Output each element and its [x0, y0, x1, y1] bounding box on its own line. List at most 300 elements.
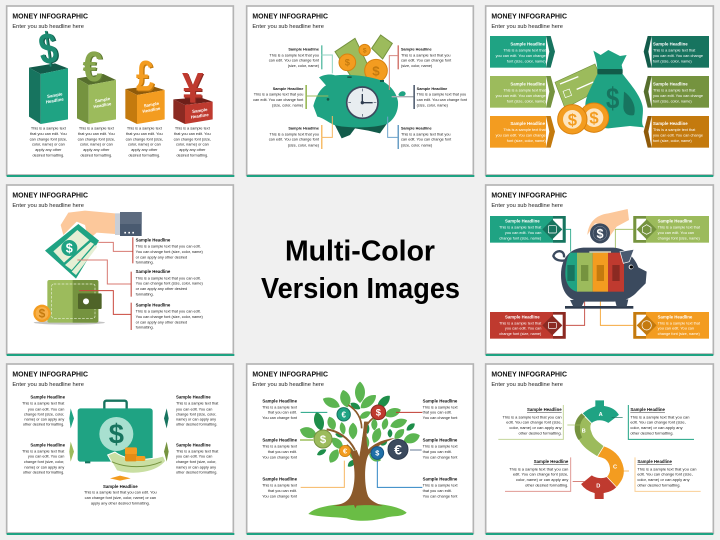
- callout: bottom left: Sample Headline: [288, 127, 319, 131]
- arrows: [69, 408, 169, 481]
- text block: first: You can change font (size, color, name): [136, 250, 203, 254]
- icon: ground: [308, 503, 407, 521]
- text block: euro: that you can edit. You: [78, 132, 115, 136]
- text block: first: This is a sample text that you can edit.: [136, 245, 201, 249]
- callout: top left: [269, 45, 332, 73]
- text block: top right: change font (size, color,: [176, 412, 216, 416]
- panel: stacked currency blocks: [7, 6, 234, 177]
- icon: pound block: [125, 53, 165, 124]
- callout: red box: Sample Headline: [505, 314, 540, 319]
- text block: left 1: You can change font: [262, 416, 298, 420]
- ribbon: right orange: font (size, color, name): [653, 139, 692, 143]
- callout: bottom left: (size, color, name): [288, 143, 320, 147]
- callout: top right: can edit. You can change font: [401, 59, 452, 63]
- text block: right 1: Sample Headline: [423, 398, 458, 403]
- connectors: [566, 229, 633, 325]
- ribbon: left teal: [490, 36, 555, 68]
- subtitle: Enter you sub headline here: [12, 24, 84, 30]
- title: MONEY INFOGRAPHIC: [491, 191, 567, 200]
- text block: yen: that you can edit. You: [174, 132, 211, 136]
- text block: top right: This is a sample text that: [176, 402, 219, 406]
- text block: right 2: [423, 438, 458, 459]
- ribbon: left teal: Sample Headline: [510, 41, 546, 46]
- text block: yen: color, name) or can: [176, 143, 209, 147]
- panel: money bag with ribbons: [486, 6, 713, 177]
- icon: yen block: Headline: [191, 112, 210, 120]
- callout: bottom right: This is a sample text that you: [401, 132, 451, 136]
- text block: middle right: name) or can apply any: [176, 465, 216, 469]
- icon: banknotes and coins: $: [372, 63, 380, 78]
- text block: left 2: You can change font: [262, 455, 298, 459]
- text block: second: or can apply any other desired: [136, 287, 187, 291]
- text block: right 1: You can change font: [423, 416, 458, 420]
- text block: middle left: name) or can apply any: [24, 465, 64, 469]
- ribbon: right green: you can edit. You can change: [653, 94, 703, 98]
- icon: briefcase: [78, 401, 153, 463]
- callout: D: edit. You can change font (size,: [513, 472, 568, 477]
- subtitle: Enter you sub headline here: [491, 382, 563, 388]
- icon: slate coin: [388, 439, 408, 459]
- ribbon: left orange: This is a sample text that: [503, 128, 547, 132]
- icon: yen block: ¥: [182, 65, 204, 113]
- text block: left 3: You can change font: [262, 494, 298, 498]
- callout: top right: This is a sample text that you: [401, 53, 451, 57]
- callout: orange box: you can edit. You can: [658, 327, 694, 331]
- text block: right 3: [423, 477, 458, 498]
- icon: slate coin: €: [394, 441, 402, 457]
- callout: teal box: This is a sample text that: [499, 226, 542, 230]
- text block: top left: This is a sample text that: [22, 402, 65, 406]
- connectors: [77, 237, 133, 330]
- puzzle piece B: [575, 413, 604, 457]
- callout: B: Sample Headline: [527, 407, 562, 412]
- ribbon: left green: font (size, color, name): [507, 99, 546, 103]
- arrows: [300, 412, 422, 487]
- callout: A: Sample Headline: [630, 407, 666, 412]
- callout: red box: This is a sample text that: [499, 321, 542, 325]
- text block: top left: other desired formatting.: [23, 423, 64, 427]
- text block: dollar: This is a sample text: [31, 127, 67, 131]
- panel: money tree: [247, 364, 473, 535]
- text block: middle right: change font (size, color,: [176, 460, 216, 464]
- text block: bottom: [84, 484, 157, 505]
- panel: puzzle dollar sign: [486, 364, 713, 535]
- icon: dollar block: Sample: [47, 91, 63, 99]
- callout: red box: change font (size, name): [499, 332, 542, 336]
- callout: bottom right: (size, color, name): [401, 143, 433, 147]
- text block: middle right: This is a sample text that: [176, 449, 219, 453]
- callout: D: This is a sample text that you can: [509, 466, 568, 471]
- icon: coins: [558, 103, 609, 134]
- text block: yen: can change font (size,: [174, 137, 211, 141]
- text block: bottom: Sample Headline: [103, 484, 138, 489]
- text block: dollar: desired formatting.: [32, 153, 64, 157]
- ribbon: right green: [644, 76, 709, 108]
- text block: first: formatting.: [136, 261, 154, 265]
- text block: left 2: Sample Headline: [262, 438, 298, 443]
- ribbon: right teal: font (size, color, name): [653, 59, 692, 63]
- icon: lime coin: $: [320, 434, 327, 446]
- text block: first: or can apply any other desired: [136, 255, 187, 259]
- panel: hand and wallet: [7, 185, 234, 356]
- callout: middle left: This is a sample text that you: [254, 93, 303, 97]
- ribbon: left orange: [490, 116, 555, 148]
- text block: left 3: This is a sample text: [262, 484, 298, 488]
- callout: D: Sample Headline: [534, 459, 569, 464]
- title: MONEY INFOGRAPHIC: [252, 12, 328, 21]
- callout: middle right: [413, 85, 468, 109]
- puzzle piece A: A: [599, 412, 603, 418]
- icon: dollar block: Headline: [45, 96, 65, 105]
- puzzle piece D: [581, 475, 617, 499]
- icon: coin: $: [39, 307, 46, 321]
- icon: briefcase: $: [109, 419, 124, 450]
- subtitle: Enter you sub headline here: [491, 24, 563, 30]
- text block: bottom: apply any other desired formatting.: [91, 501, 150, 505]
- callout: bottom right: Sample Headline: [401, 127, 432, 131]
- text block: second: Sample Headline: [136, 269, 171, 274]
- text block: third: formatting.: [136, 326, 154, 330]
- text block: middle right: Sample Headline: [176, 442, 211, 447]
- text block: second: formatting.: [136, 292, 154, 296]
- callout: middle right: can edit. You can change font: [417, 98, 468, 102]
- icon: euro block: Headline: [93, 101, 112, 109]
- icon: coin: [33, 305, 51, 322]
- text block: dollar: apply any other: [35, 148, 62, 152]
- heading: multi-color version images: Version Images: [261, 273, 460, 305]
- callout: green box: you can edit. You can: [658, 231, 694, 235]
- callout: teal box: [490, 216, 566, 243]
- ribbon: right teal: [644, 36, 709, 68]
- callout: D: [505, 457, 592, 491]
- icon: banknotes and coins: $: [345, 58, 351, 68]
- text block: yen: apply any other: [179, 148, 206, 152]
- text block: pound: that you can edit. You: [126, 132, 163, 136]
- callout: top right: Sample Headline: [401, 48, 432, 52]
- icon: coins: $: [589, 109, 599, 128]
- text block: euro: can change font (size,: [78, 137, 115, 141]
- text block: left 2: [262, 438, 298, 459]
- icon: dollar block: $: [37, 24, 62, 75]
- ribbon: right teal: Sample Headline: [653, 41, 688, 46]
- text block: top left: Sample Headline: [30, 395, 66, 400]
- callout: D: other desired formatting.: [525, 482, 568, 487]
- ribbon: left green: This is a sample text that: [503, 88, 547, 92]
- callout: green box: This is a sample text that: [658, 226, 701, 230]
- icon: teal coin: €: [341, 410, 346, 419]
- icon: yen block: ¥: [183, 65, 205, 113]
- text block: pound: desired formatting.: [128, 153, 160, 157]
- text block: pound: apply any other: [131, 148, 158, 152]
- text block: right 1: that you can edit.: [423, 411, 452, 415]
- icon: banknotes and coins: $: [363, 47, 367, 54]
- icon: money bag: $: [606, 82, 620, 115]
- text block: right 2: This is a sample text: [423, 445, 458, 449]
- icon: coins: $: [568, 110, 578, 129]
- text block: right 2: Sample Headline: [423, 438, 458, 443]
- callout: C: This is a sample text that you can: [637, 466, 696, 471]
- ribbon: right green: This is a sample text that: [653, 88, 696, 92]
- callout: A: [612, 405, 694, 439]
- text block: first: [136, 237, 203, 265]
- text block: top right: other desired formatting.: [176, 423, 217, 427]
- callout: C: Sample Headline: [637, 459, 673, 464]
- puzzle piece C: [597, 446, 624, 487]
- callout: middle left: can edit. You can change font: [253, 98, 304, 102]
- text block: left 3: [262, 477, 298, 498]
- callout: middle left: (size, color, name): [272, 104, 304, 108]
- icon: blue coin: [371, 447, 384, 459]
- icon: yen block: Sample: [192, 107, 208, 114]
- text block: left 3: that you can edit.: [268, 489, 297, 493]
- icon: wallet: [34, 280, 105, 325]
- title: MONEY INFOGRAPHIC: [12, 12, 88, 21]
- heading: multi-color version images: [261, 236, 460, 305]
- icon: pound block: £: [137, 53, 156, 101]
- callout: green box: [633, 216, 709, 243]
- puzzle piece D: D: [596, 484, 600, 490]
- callout: teal box: you can edit. You can: [505, 231, 541, 235]
- text block: middle left: other desired formatting.: [23, 471, 64, 475]
- ribbon: right green: Sample Headline: [653, 81, 688, 86]
- puzzle piece C: C: [613, 464, 617, 470]
- text block: dollar: can change font (size,: [30, 137, 67, 141]
- text block: middle left: [22, 442, 66, 475]
- icon: banknotes and coins: [335, 35, 392, 82]
- callout: red box: you can edit. You can: [505, 327, 541, 331]
- icon: hand with coin: [587, 209, 629, 243]
- callout: orange box: This is a sample text that: [658, 321, 701, 325]
- icon: euro block: [77, 43, 116, 124]
- text block: right 3: that you can edit.: [423, 489, 452, 493]
- panel: briefcase: [7, 364, 234, 535]
- icon: tree leaves: [298, 382, 421, 469]
- title: MONEY INFOGRAPHIC: [491, 12, 567, 21]
- heading: multi-color version images: Multi-Color: [285, 236, 435, 268]
- callout: bottom left: This is a sample text that you: [269, 132, 319, 136]
- text block: right 3: This is a sample text: [423, 484, 458, 488]
- text block: dollar: color, name) or can: [32, 143, 65, 147]
- title: MONEY INFOGRAPHIC: [12, 370, 88, 379]
- subtitle: Enter you sub headline here: [252, 24, 324, 30]
- text block: left 2: This is a sample text: [262, 445, 298, 449]
- callout: middle right: Sample Headline: [417, 87, 447, 91]
- icon: orange coin: €: [343, 447, 347, 456]
- icon: banknotes and coins: [108, 447, 166, 473]
- icon: euro block: Sample: [94, 96, 111, 104]
- ribbon: left orange: Sample Headline: [510, 121, 546, 126]
- text block: right 1: [423, 398, 458, 420]
- icon: pig body: [313, 74, 414, 138]
- callout: red box: [490, 312, 566, 339]
- text block: euro: color, name) or can: [80, 143, 113, 147]
- text block: middle left: you can edit. You can: [28, 455, 64, 459]
- text block: second: [136, 269, 203, 296]
- text block: middle right: other desired formatting.: [176, 471, 217, 475]
- subtitle: Enter you sub headline here: [252, 382, 324, 388]
- text block: euro: desired formatting.: [80, 153, 112, 157]
- subtitle: Enter you sub headline here: [12, 203, 84, 209]
- text block: third: [136, 302, 203, 330]
- callout: A: other desired formatting.: [630, 430, 674, 435]
- icon: euro block: €: [83, 43, 103, 91]
- text block: yen: This is a sample text: [175, 127, 211, 131]
- callout: A: This is a sample text that you can: [630, 414, 689, 419]
- icon: tree trunk: [327, 405, 395, 508]
- text block: right 2: You can change font: [423, 455, 458, 459]
- callout: top right: [389, 45, 452, 90]
- callout: top right: (size, color, name): [401, 64, 433, 68]
- subtitle: Enter you sub headline here: [491, 203, 563, 209]
- ribbon: left green: Sample Headline: [510, 81, 546, 86]
- callout: bottom left: can edit. You can change font: [269, 138, 320, 142]
- text block: top left: change font (size, color,: [24, 412, 64, 416]
- callout: A: color, name) or can apply any: [630, 425, 683, 430]
- title: MONEY INFOGRAPHIC: [491, 370, 567, 379]
- puzzle piece A: [582, 400, 619, 423]
- text block: right 3: Sample Headline: [423, 477, 458, 482]
- text block: middle left: Sample Headline: [30, 442, 66, 447]
- callout: bottom right: can edit. You can change font: [401, 138, 452, 142]
- puzzle piece B: B: [582, 429, 586, 435]
- callout: middle right: (size, color, name): [417, 104, 449, 108]
- callout: B: [498, 405, 582, 439]
- ribbon: left orange: you can edit. You can change: [496, 134, 546, 138]
- ribbon: left teal: you can edit. You can change: [496, 54, 546, 58]
- text block: bottom: can change font (size, color, name) or can: [85, 496, 156, 500]
- text block: left 1: Sample Headline: [262, 398, 298, 403]
- ribbon: right orange: This is a sample text that: [653, 128, 696, 132]
- callout: green box: change font (size, name): [658, 236, 701, 240]
- ribbon: right orange: you can edit. You can change: [653, 134, 703, 138]
- icon: credit card: [555, 64, 599, 108]
- callout: middle left: Sample Headline: [273, 87, 303, 91]
- text block: right 1: This is a sample text: [423, 405, 458, 409]
- callout: D: color, name) or can apply any: [516, 477, 568, 482]
- callout: orange box: [633, 312, 709, 339]
- callout: top left: Sample Headline: [288, 48, 319, 52]
- callout: middle left: [253, 85, 328, 109]
- title: MONEY INFOGRAPHIC: [12, 191, 88, 200]
- text block: left 1: [262, 398, 298, 420]
- icon: blue coin: $: [375, 449, 379, 458]
- text block: second: This is a sample text that you can edit.: [136, 276, 201, 280]
- text block: third: This is a sample text that you can edit.: [136, 310, 201, 314]
- text block: euro: apply any other: [83, 148, 110, 152]
- ribbon: right orange: [644, 116, 709, 148]
- text block: pound: color, name) or can: [128, 143, 161, 147]
- callout: A: edit. You can change font (size,: [630, 420, 686, 425]
- icon: orange coin: [339, 445, 351, 457]
- text block: top right: Sample Headline: [176, 395, 211, 400]
- icon: red coin: [371, 405, 386, 420]
- title: MONEY INFOGRAPHIC: [252, 370, 328, 379]
- callout: top left: (size, color, name): [288, 64, 320, 68]
- text block: yen: desired formatting.: [176, 153, 208, 157]
- icon: money bag: [585, 50, 644, 128]
- icon: lime coin: [314, 430, 332, 448]
- text block: right 3: You can change font: [423, 494, 458, 498]
- callout: teal box: change font (size, name): [499, 236, 542, 240]
- callout: C: color, name) or can apply any: [637, 477, 690, 482]
- text block: top left: name) or can apply any: [24, 418, 64, 422]
- icon: yen block: [173, 65, 213, 124]
- icon: red coin: $: [376, 408, 382, 418]
- text block: third: You can change font (size, color, name): [136, 315, 203, 319]
- text block: second: You can change font (size, color, name): [136, 282, 203, 286]
- callout: top left: can edit. You can change font: [269, 59, 320, 63]
- callout: C: other desired formatting.: [637, 482, 681, 487]
- callout: top left: This is a sample text that you: [269, 53, 319, 57]
- callout: green box: Sample Headline: [658, 219, 693, 224]
- text block: first: Sample Headline: [136, 237, 171, 242]
- callout: C: edit. You can change font (size,: [637, 472, 693, 477]
- text block: middle right: you can edit. You can: [176, 455, 212, 459]
- text block: left 2: that you can edit.: [268, 450, 297, 454]
- callout: B: edit. You can change font (size,: [506, 420, 562, 425]
- text block: right 2: that you can edit.: [423, 450, 452, 454]
- callout: B: This is a sample text that you can: [503, 414, 562, 419]
- text block: third: or can apply any other desired: [136, 320, 187, 324]
- text block: dollar: that you can edit. You: [30, 132, 67, 136]
- text block: pound: can change font (size,: [126, 137, 163, 141]
- ribbon: left green: [490, 76, 555, 108]
- text block: left 1: that you can edit.: [268, 411, 297, 415]
- ribbon: left green: you can edit. You can change: [496, 94, 546, 98]
- text block: top left: you can edit. You can: [28, 407, 64, 411]
- ribbon: right orange: Sample Headline: [653, 121, 688, 126]
- ribbon: left orange: font (size, color, name): [507, 139, 546, 143]
- icon: teal coin: [337, 408, 350, 421]
- icon: pound block: Headline: [142, 106, 161, 114]
- icon: pound block: £: [136, 53, 154, 101]
- text block: middle right: [176, 442, 219, 475]
- callout: C: [618, 457, 701, 491]
- callout: orange box: change font (size, name): [658, 332, 701, 336]
- text block: pound: This is a sample text: [127, 127, 163, 131]
- ribbon: left teal: This is a sample text that: [503, 48, 547, 52]
- callout: orange box: Sample Headline: [658, 314, 693, 319]
- icon: hand with sleeve: [61, 211, 142, 240]
- callout: teal box: Sample Headline: [505, 219, 540, 224]
- text block: top right: [176, 395, 219, 427]
- ribbon: right teal: you can edit. You can change: [653, 54, 703, 58]
- icon: pound block: Sample: [143, 101, 160, 108]
- ribbon: left teal: font (size, color, name): [507, 59, 546, 63]
- text block: top left: [22, 395, 66, 427]
- callout: B: color, name) or can apply any: [509, 425, 562, 430]
- subtitle: Enter you sub headline here: [12, 382, 84, 388]
- icon: clock: [347, 87, 378, 118]
- callout: B: other desired formatting.: [518, 430, 562, 435]
- text block: left 3: Sample Headline: [262, 477, 298, 482]
- text block: top right: you can edit. You can: [176, 407, 212, 411]
- panel: piggy bank with clock: [247, 6, 474, 177]
- text block: top right: name) or can apply any: [176, 418, 216, 422]
- ribbon: right teal: This is a sample text that: [653, 48, 696, 52]
- text block: bottom: This is a sample text that you can edit. You: [84, 491, 157, 495]
- callout: bottom left: [269, 116, 332, 149]
- text block: euro: This is a sample text: [79, 127, 115, 131]
- icon: euro block: €: [84, 44, 104, 92]
- ribbon: right green: font (size, color, name): [653, 99, 692, 103]
- callout: bottom right: [388, 117, 452, 149]
- icon: banknotes: [45, 224, 99, 279]
- icon: dollar block: [29, 23, 68, 124]
- icon: hand with coin: $: [596, 227, 604, 241]
- panel: colored piggy bank: [486, 185, 713, 356]
- text block: third: Sample Headline: [136, 302, 171, 307]
